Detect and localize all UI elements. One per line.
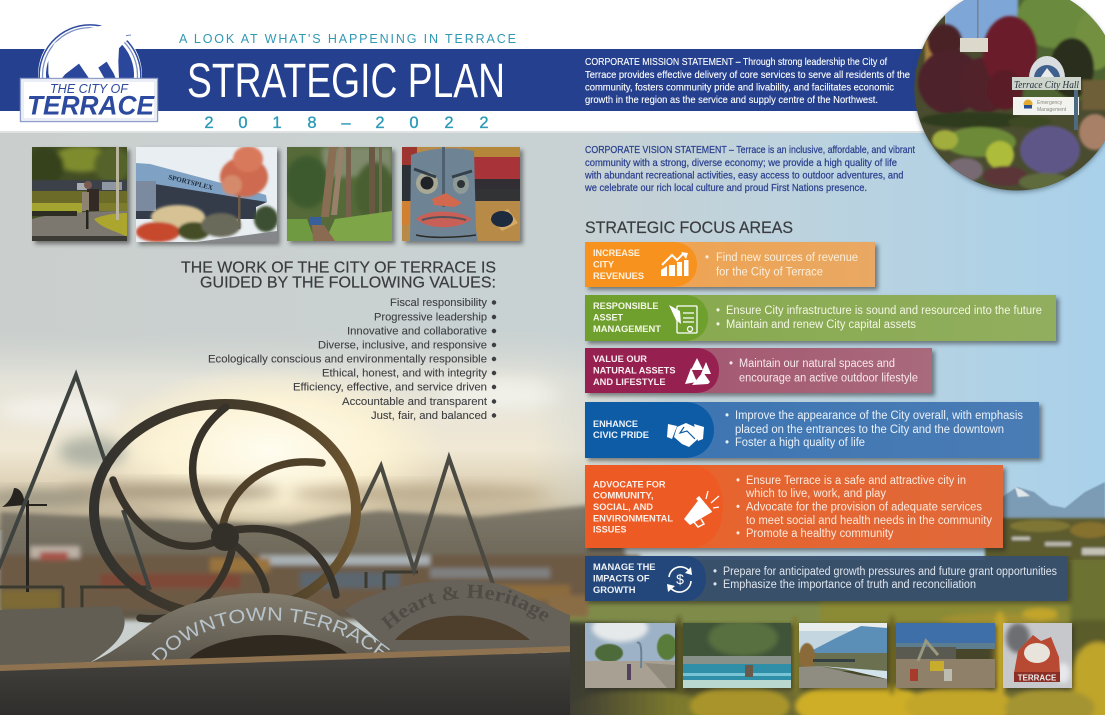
photo: terrace sign in snow: TERRACE [1018,674,1057,682]
label: RESPONSIBLE [593,301,658,311]
years: 2 [204,114,214,132]
label: GROWTH [593,585,636,595]
right forest and valley [985,518,1105,563]
years: 8 [307,114,317,132]
description: • [716,319,720,331]
tagline: A LOOK AT WHAT'S HAPPENING IN TERRACE [179,32,516,46]
mission statement: community, fosters community pride and livability, and facilitates economic [585,82,894,94]
description: • [736,502,740,514]
icon: circular dollar [667,567,692,592]
label [593,562,656,595]
values list: Progressive leadership [374,312,487,324]
label: ENHANCE [593,419,638,429]
values list: Ecologically conscious and environmentally responsible [208,354,487,366]
description: Ensure City infrastructure is sound and resourced into the future [726,305,1042,317]
label [593,248,644,281]
white header strip edge [0,131,1105,133]
panel: manage the impacts of growth [585,556,1071,604]
years: 0 [238,114,248,132]
sign: Emergency [1037,100,1063,106]
label: NATURAL ASSETS [593,366,676,376]
values heading [181,260,496,292]
values heading: GUIDED BY THE FOLLOWING VALUES: [200,274,496,292]
city of terrace logo [20,20,158,121]
description: • [713,566,717,578]
logo name plate [20,78,158,122]
label [593,354,676,387]
description: Foster a high quality of life [735,437,865,449]
description: to meet social and health needs in the community [746,515,992,527]
description [716,305,1042,331]
label: ISSUES [593,524,626,534]
icon: trees and mountain [685,358,711,385]
building roof [960,38,988,52]
years: 1 [272,114,282,132]
mission statement: CORPORATE MISSION STATEMENT – Through strong leadership the City of [585,56,887,68]
years: 2 [444,114,454,132]
photo: forest trail [285,147,395,244]
photo row: focus areas [585,614,1074,690]
label: CIVIC PRIDE [593,430,649,440]
concrete archway with lettering [0,580,570,665]
photo: splash park [585,614,677,690]
label: ASSET [593,312,623,322]
label: VALUE OUR [593,354,647,364]
values list: Fiscal responsibility [390,297,487,309]
blue header band [0,49,925,111]
years: 2 [375,114,385,132]
panel: increase city revenues [585,242,878,290]
vision statement [584,144,915,194]
description: • [713,579,717,591]
left sky with clouds [0,351,645,530]
vision statement: CORPORATE VISION STATEMENT – Terrace is an inclusive, affordable, and vibrant [585,144,915,156]
description: for the City of Terrace [716,266,823,278]
panel: advocate for community social and environmental issues [585,465,1006,551]
sign [1012,56,1081,130]
photo: cyclist [24,146,130,244]
photo: sportsplex: SPORTSPLEX [168,173,214,192]
foreground wall [0,646,570,715]
lamp post [2,488,47,592]
label: ADVOCATE FOR [593,480,666,490]
description [736,475,992,540]
label: SOCIAL, AND [593,502,653,512]
photo row: values [24,146,523,245]
icon: document and quill [669,305,697,333]
description: • [716,305,720,317]
description: which to live, work, and play [745,488,886,500]
icon: circular dollar: $ [676,571,684,587]
description [713,566,1057,591]
label: MANAGEMENT [593,324,661,334]
label: ENVIRONMENTAL [593,514,673,524]
description: Find new sources of revenue [716,252,858,264]
description: Improve the appearance of the City overall, with emphasis [735,410,1023,422]
sign: Management [1037,107,1067,113]
photo: sportsplex [136,146,280,245]
years: 0 [409,114,419,132]
description: encourage an active outdoor lifestyle [739,372,918,384]
description: Advocate for the provision of adequate services [746,502,982,514]
logo name plate: THE CITY OF [50,82,129,96]
photo: bridge and mountain [799,623,889,690]
label: AND LIFESTYLE [593,377,666,387]
description: Emphasize the importance of truth and reconciliation [723,579,976,591]
description [729,358,918,384]
values list [208,297,496,422]
values list: Efficiency, effective, and service driven [293,382,487,394]
city hall circular photo [910,0,1105,200]
photo: river kayaker [683,620,793,690]
description: Maintain our natural spaces and [739,358,895,370]
years [204,114,489,132]
description: • [736,475,740,487]
label: CITY [593,260,614,270]
values list: Ethical, honest, and with integrity [322,368,488,380]
values list: Accountable and transparent [342,396,487,408]
description: • [736,528,740,540]
description: placed on the entrances to the City and the downtown [735,424,1004,436]
photo: totem pole [402,147,523,244]
logo name plate: TERRACE [27,90,155,120]
values list: Diverse, inclusive, and responsive [318,340,487,352]
icon: handshake [667,423,704,447]
label: INCREASE [593,248,640,258]
sign: Terrace City Hall [1014,80,1079,91]
label: COMMUNITY, [593,490,654,500]
downtown lettering: DOWNTOWN TERRACE [152,607,390,660]
vision statement: with abundant recreational activities, easy access to outdoor adventures, and [584,170,904,182]
description: Ensure Terrace is a safe and attractive city in [746,475,966,487]
description: • [705,252,709,264]
panel: responsible asset management [585,295,1059,344]
photo: construction site [896,623,997,690]
values heading: THE WORK OF THE CITY OF TERRACE IS [181,260,496,276]
icon: rising bar chart [661,252,688,276]
years: – [341,114,351,132]
label [593,301,661,334]
description: Prepare for anticipated growth pressures and future grant opportunities [723,566,1057,578]
label [593,419,649,440]
vision statement: community with a strong, diverse economy; we provide a high quality of life [585,157,897,169]
label: IMPACTS OF [593,574,650,584]
label: REVENUES [593,271,644,281]
description: • [725,410,729,422]
values list: Innovative and collaborative [347,326,487,338]
vision statement: we celebrate our rich local culture and proud First Nations presence. [584,182,867,194]
description [725,410,1023,449]
photo: terrace sign in snow [1003,623,1074,690]
description: Promote a healthy community [746,528,894,540]
description: • [725,437,729,449]
sculpture: wheel [94,404,356,619]
sculpture: mountain frames [0,375,493,590]
mission statement: Terrace provides effective delivery of core services to serve all residents of the [585,69,910,81]
values list: Just, fair, and balanced [371,410,487,422]
mission statement [585,56,910,106]
panel: value natural assets and lifestyle [585,348,935,396]
label [593,480,673,534]
strategic focus areas heading: STRATEGIC FOCUS AREAS [585,219,793,237]
label: MANAGE THE [593,562,656,572]
railing [0,572,418,612]
heart and heritage lettering: Heart & Heritage [380,584,548,630]
description: Maintain and renew City capital assets [726,319,916,331]
description [705,252,858,278]
hills and town [0,505,640,620]
title: STRATEGIC PLAN [187,55,505,108]
distant mountains [1003,482,1105,520]
logo rings and bear [38,20,142,82]
years: 2 [479,114,489,132]
panel: enhance civic pride [585,402,1042,461]
description: • [729,358,733,370]
icon: megaphone [684,491,719,527]
mission statement: growth in the region as the service and supply centre of the Northwest. [585,94,878,106]
